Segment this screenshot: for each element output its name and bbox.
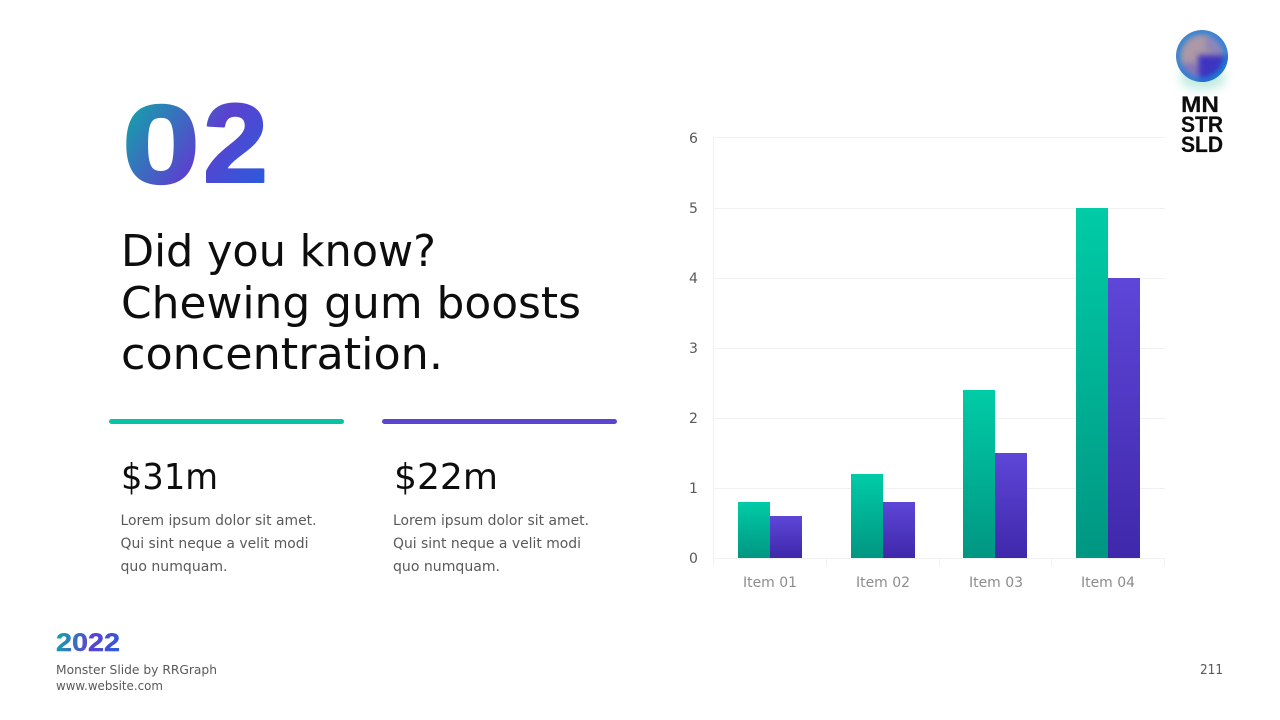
stat description one: Lorem ipsum dolor sit amet.: [120, 513, 316, 529]
bars: item 03: [963, 390, 1027, 558]
logo wordmark: [1181, 92, 1223, 157]
x axis labels: [743, 575, 1135, 591]
stat description two: Qui sint neque a velit modi: [393, 536, 581, 552]
logo wordmark: STR: [1181, 112, 1223, 137]
panel: stat two: [382, 419, 617, 575]
stat description one: [120, 513, 316, 575]
stat value one: $31m: [121, 457, 218, 498]
stat description two: [393, 513, 589, 575]
stat value two: $22m: [394, 457, 498, 498]
y axis labels: [689, 131, 698, 567]
y axis labels: 5: [689, 201, 698, 217]
heading: Chewing gum boosts: [121, 278, 581, 329]
y axis labels: 0: [689, 551, 698, 567]
y axis labels: 6: [689, 131, 698, 147]
heading: [121, 226, 581, 380]
icon: orb shadow: [1180, 66, 1226, 90]
x axis labels: Item 04: [1081, 575, 1135, 591]
stat description one: Qui sint neque a velit modi: [120, 536, 308, 552]
purple rule: [382, 419, 617, 424]
x axis labels: Item 03: [969, 575, 1023, 591]
big number: 2: [203, 81, 268, 206]
bars: item 04: [1076, 208, 1140, 558]
x axis labels: Item 01: [743, 575, 797, 591]
x axis labels: Item 02: [856, 575, 910, 591]
big number: [122, 81, 268, 207]
logo wordmark: MN: [1181, 92, 1219, 117]
panel: stat one: [109, 419, 344, 575]
footer: [56, 629, 217, 693]
icon: orb: [1176, 30, 1228, 82]
y axis labels: 3: [689, 341, 698, 357]
bars: item 01: [738, 502, 802, 558]
bars: item 02: [851, 474, 915, 558]
year: 2022: [56, 629, 120, 657]
bar chart: [689, 131, 1165, 591]
heading: Did you know?: [121, 226, 436, 277]
stat description two: Lorem ipsum dolor sit amet.: [393, 513, 589, 529]
website: www.website.com: [56, 678, 163, 693]
stat description one: quo numquam.: [120, 559, 228, 575]
y axis labels: 2: [689, 411, 698, 427]
page number: 211: [1200, 662, 1223, 678]
logo wordmark: SLD: [1181, 132, 1223, 157]
heading: concentration.: [121, 329, 443, 380]
logo: [1176, 30, 1230, 152]
credit: Monster Slide by RRGraph: [56, 662, 217, 677]
green rule: [109, 419, 344, 424]
big number: 0: [122, 82, 200, 207]
y axis labels: 4: [689, 271, 698, 287]
y axis labels: 1: [689, 481, 698, 497]
stat description two: quo numquam.: [393, 559, 500, 575]
